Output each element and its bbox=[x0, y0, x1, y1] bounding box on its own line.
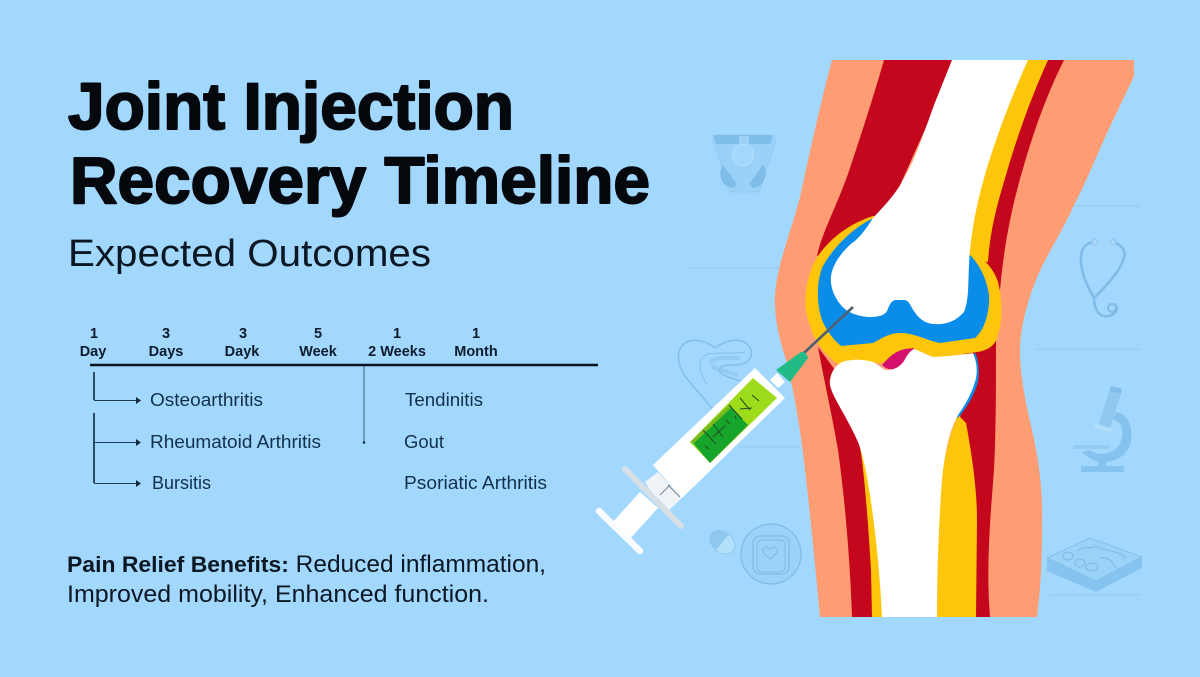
icon: microscope bbox=[1073, 386, 1132, 472]
joint capsule bbox=[805, 216, 1001, 364]
condition labels: Tendinitis bbox=[405, 390, 483, 410]
condition labels: Psoriatic Arthritis bbox=[404, 473, 547, 493]
needle hub bbox=[776, 352, 808, 382]
title: Recovery Timeline bbox=[70, 143, 650, 217]
dark fluid bbox=[693, 406, 748, 463]
needle bbox=[804, 307, 853, 353]
condition labels: Gout bbox=[404, 432, 444, 452]
condition labels: Osteoarthritis bbox=[150, 390, 263, 410]
timeline labels: Dayk bbox=[225, 344, 260, 360]
centre connector bbox=[363, 366, 365, 444]
timeline labels: 3 bbox=[162, 326, 170, 342]
upper muscle right bbox=[980, 60, 1064, 300]
lower muscle right bbox=[960, 335, 996, 617]
finger flange bbox=[625, 469, 681, 526]
icon: stethoscope bbox=[1081, 239, 1125, 316]
timeline labels: 2 Weeks bbox=[368, 344, 426, 360]
icon: pelvis bbox=[713, 135, 776, 192]
left bracket with arrows bbox=[94, 372, 141, 487]
timeline labels: 5 bbox=[314, 326, 322, 342]
timeline labels: Month bbox=[454, 344, 498, 360]
lower tendon left bbox=[860, 447, 890, 617]
femur bbox=[831, 60, 1028, 324]
timeline labels: 1 bbox=[393, 326, 401, 342]
syringe bbox=[599, 307, 853, 551]
light fluid bbox=[690, 378, 777, 463]
condition labels: Bursitis bbox=[152, 473, 211, 493]
icon: tissue slide bbox=[1047, 538, 1142, 592]
blue sliver bbox=[957, 352, 979, 419]
lower muscle left bbox=[818, 347, 880, 617]
title bbox=[68, 69, 650, 217]
knee anatomy bbox=[775, 60, 1134, 617]
barrel neck bbox=[770, 373, 785, 388]
lower tendon right bbox=[937, 415, 977, 617]
tibia bbox=[830, 349, 977, 617]
barrel bbox=[653, 368, 785, 498]
thumb rest bbox=[599, 511, 640, 551]
subtitle: Expected Outcomes bbox=[68, 233, 431, 275]
timeline labels: Day bbox=[80, 344, 106, 360]
plunger seal bbox=[645, 472, 682, 514]
timeline labels: 1 bbox=[472, 326, 480, 342]
timeline labels bbox=[80, 326, 498, 360]
synovial fluid bbox=[818, 218, 989, 346]
pain relief benefits: Improved mobility, Enhanced function. bbox=[67, 581, 489, 608]
skin bbox=[775, 60, 1134, 617]
title: Joint Injection bbox=[68, 69, 514, 143]
timeline bbox=[80, 326, 598, 493]
tendon right bbox=[962, 60, 1048, 262]
timeline labels: Week bbox=[299, 344, 338, 360]
plunger shaft bbox=[611, 492, 658, 541]
timeline axis bbox=[90, 364, 598, 366]
condition labels bbox=[150, 390, 547, 493]
timeline labels: 1 bbox=[90, 326, 98, 342]
condition labels: Rheumatoid Arthritis bbox=[150, 432, 321, 452]
olive fluid strip bbox=[690, 404, 732, 444]
icon: capsule bbox=[705, 525, 739, 559]
icon: intestine outline bbox=[678, 340, 752, 412]
upper muscle left bbox=[817, 60, 956, 256]
icon: heart monitor bbox=[741, 524, 801, 584]
timeline labels: 3 bbox=[239, 326, 247, 342]
pain relief benefits bbox=[67, 551, 546, 608]
timeline labels: Days bbox=[149, 344, 183, 360]
meniscus bbox=[882, 348, 914, 369]
pain relief benefits: Pain Relief Benefits: Reduced inflammation, bbox=[67, 551, 546, 578]
scale ticks bbox=[703, 395, 759, 449]
